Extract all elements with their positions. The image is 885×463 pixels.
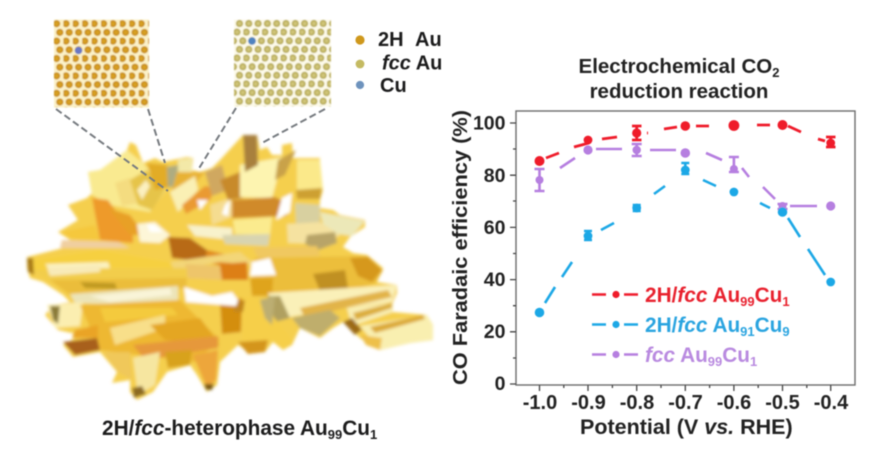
- x tick labels: [523, 392, 849, 414]
- x tick labels: -0.4: [814, 392, 849, 414]
- caption: 2H/fcc-heterophase Au: [102, 417, 328, 440]
- legend: 2H/fcc Au91Cu9: 9: [782, 324, 790, 339]
- legend: 2H/fcc Au99Cu1: 2H/fcc Au: [645, 284, 740, 307]
- chart title: Electrochemical CO: [579, 55, 772, 78]
- legend fcc Au: fcc Au: [382, 52, 442, 74]
- y tick labels: 20: [484, 321, 506, 343]
- atom lattice: 2H Au: [54, 20, 149, 108]
- legend: fcc Au99Cu1: 1: [750, 354, 757, 369]
- legend: atoms: [355, 29, 442, 97]
- legend: 2H/fcc Au99Cu1: [592, 284, 790, 309]
- legend: fcc Au99Cu1: 99: [708, 354, 722, 369]
- y tick labels: [473, 112, 506, 395]
- flake highlights and shadows: [27, 135, 433, 398]
- chart title: [579, 55, 779, 103]
- legend: fcc Au99Cu1: Cu: [722, 344, 750, 367]
- x tick labels: -0.7: [668, 392, 703, 414]
- y tick labels: 60: [484, 217, 506, 239]
- y tick labels: 40: [484, 269, 506, 291]
- caption: 1: [370, 427, 377, 442]
- x tick labels: -0.9: [571, 392, 606, 414]
- legend: 2H/fcc Au99Cu1: 99: [740, 294, 755, 309]
- chart: CO Faradaic efficiency: [449, 110, 855, 439]
- legend 2H Au: Au: [415, 29, 442, 51]
- x tick labels: -0.5: [765, 392, 800, 414]
- legend: 2H/fcc Au91Cu9: [592, 314, 790, 339]
- x tick labels: -0.6: [717, 392, 751, 414]
- x tick labels: -1.0: [523, 392, 557, 414]
- legend: 2H/fcc Au99Cu1: Cu: [755, 284, 782, 307]
- plot frame: [516, 111, 855, 385]
- legend: 2H/fcc Au91Cu9: 2H/fcc Au: [645, 314, 740, 337]
- x axis title: Potential (V vs. RHE): [580, 415, 793, 439]
- legend 2H Au: 2H: [378, 29, 404, 51]
- flake holes: [147, 193, 292, 306]
- axis ticks: [510, 123, 831, 391]
- chart legend: [592, 284, 790, 369]
- chart title: 2: [772, 65, 779, 80]
- Cu atom in fcc lattice: [248, 37, 256, 45]
- Cu atom in 2H lattice: [75, 47, 82, 54]
- y tick labels: 80: [484, 165, 506, 187]
- legend: 2H/fcc Au99Cu1: 1: [782, 294, 790, 309]
- caption: Cu: [342, 417, 370, 440]
- series: fcc Au99Cu1: [534, 144, 835, 211]
- y axis title: CO Faradaic efficiency (%): [449, 110, 472, 385]
- y tick labels: 100: [473, 112, 506, 134]
- legend: fcc Au99Cu1: fcc Au: [645, 344, 708, 367]
- chart title: reduction reaction: [590, 80, 768, 103]
- legend: 2H/fcc Au91Cu9: 91: [740, 324, 755, 339]
- atom lattice: fcc Au: [234, 20, 331, 106]
- illustration: gold heterophase nanosheet: [27, 135, 433, 400]
- y tick labels: 0: [495, 373, 506, 395]
- legend: 2H/fcc Au91Cu9: Cu: [755, 314, 782, 337]
- flake silhouette: [27, 135, 433, 400]
- series: 2H/fcc Au91Cu9: [535, 163, 835, 317]
- legend: fcc Au99Cu1: [592, 344, 757, 369]
- x tick labels: -0.8: [620, 392, 654, 414]
- legend 2H Au: [355, 29, 442, 51]
- dashed zoom lines: [56, 108, 325, 191]
- caption: 99: [328, 427, 342, 442]
- legend Cu: Cu: [380, 75, 407, 97]
- series: 2H/fcc Au99Cu1: [534, 120, 836, 166]
